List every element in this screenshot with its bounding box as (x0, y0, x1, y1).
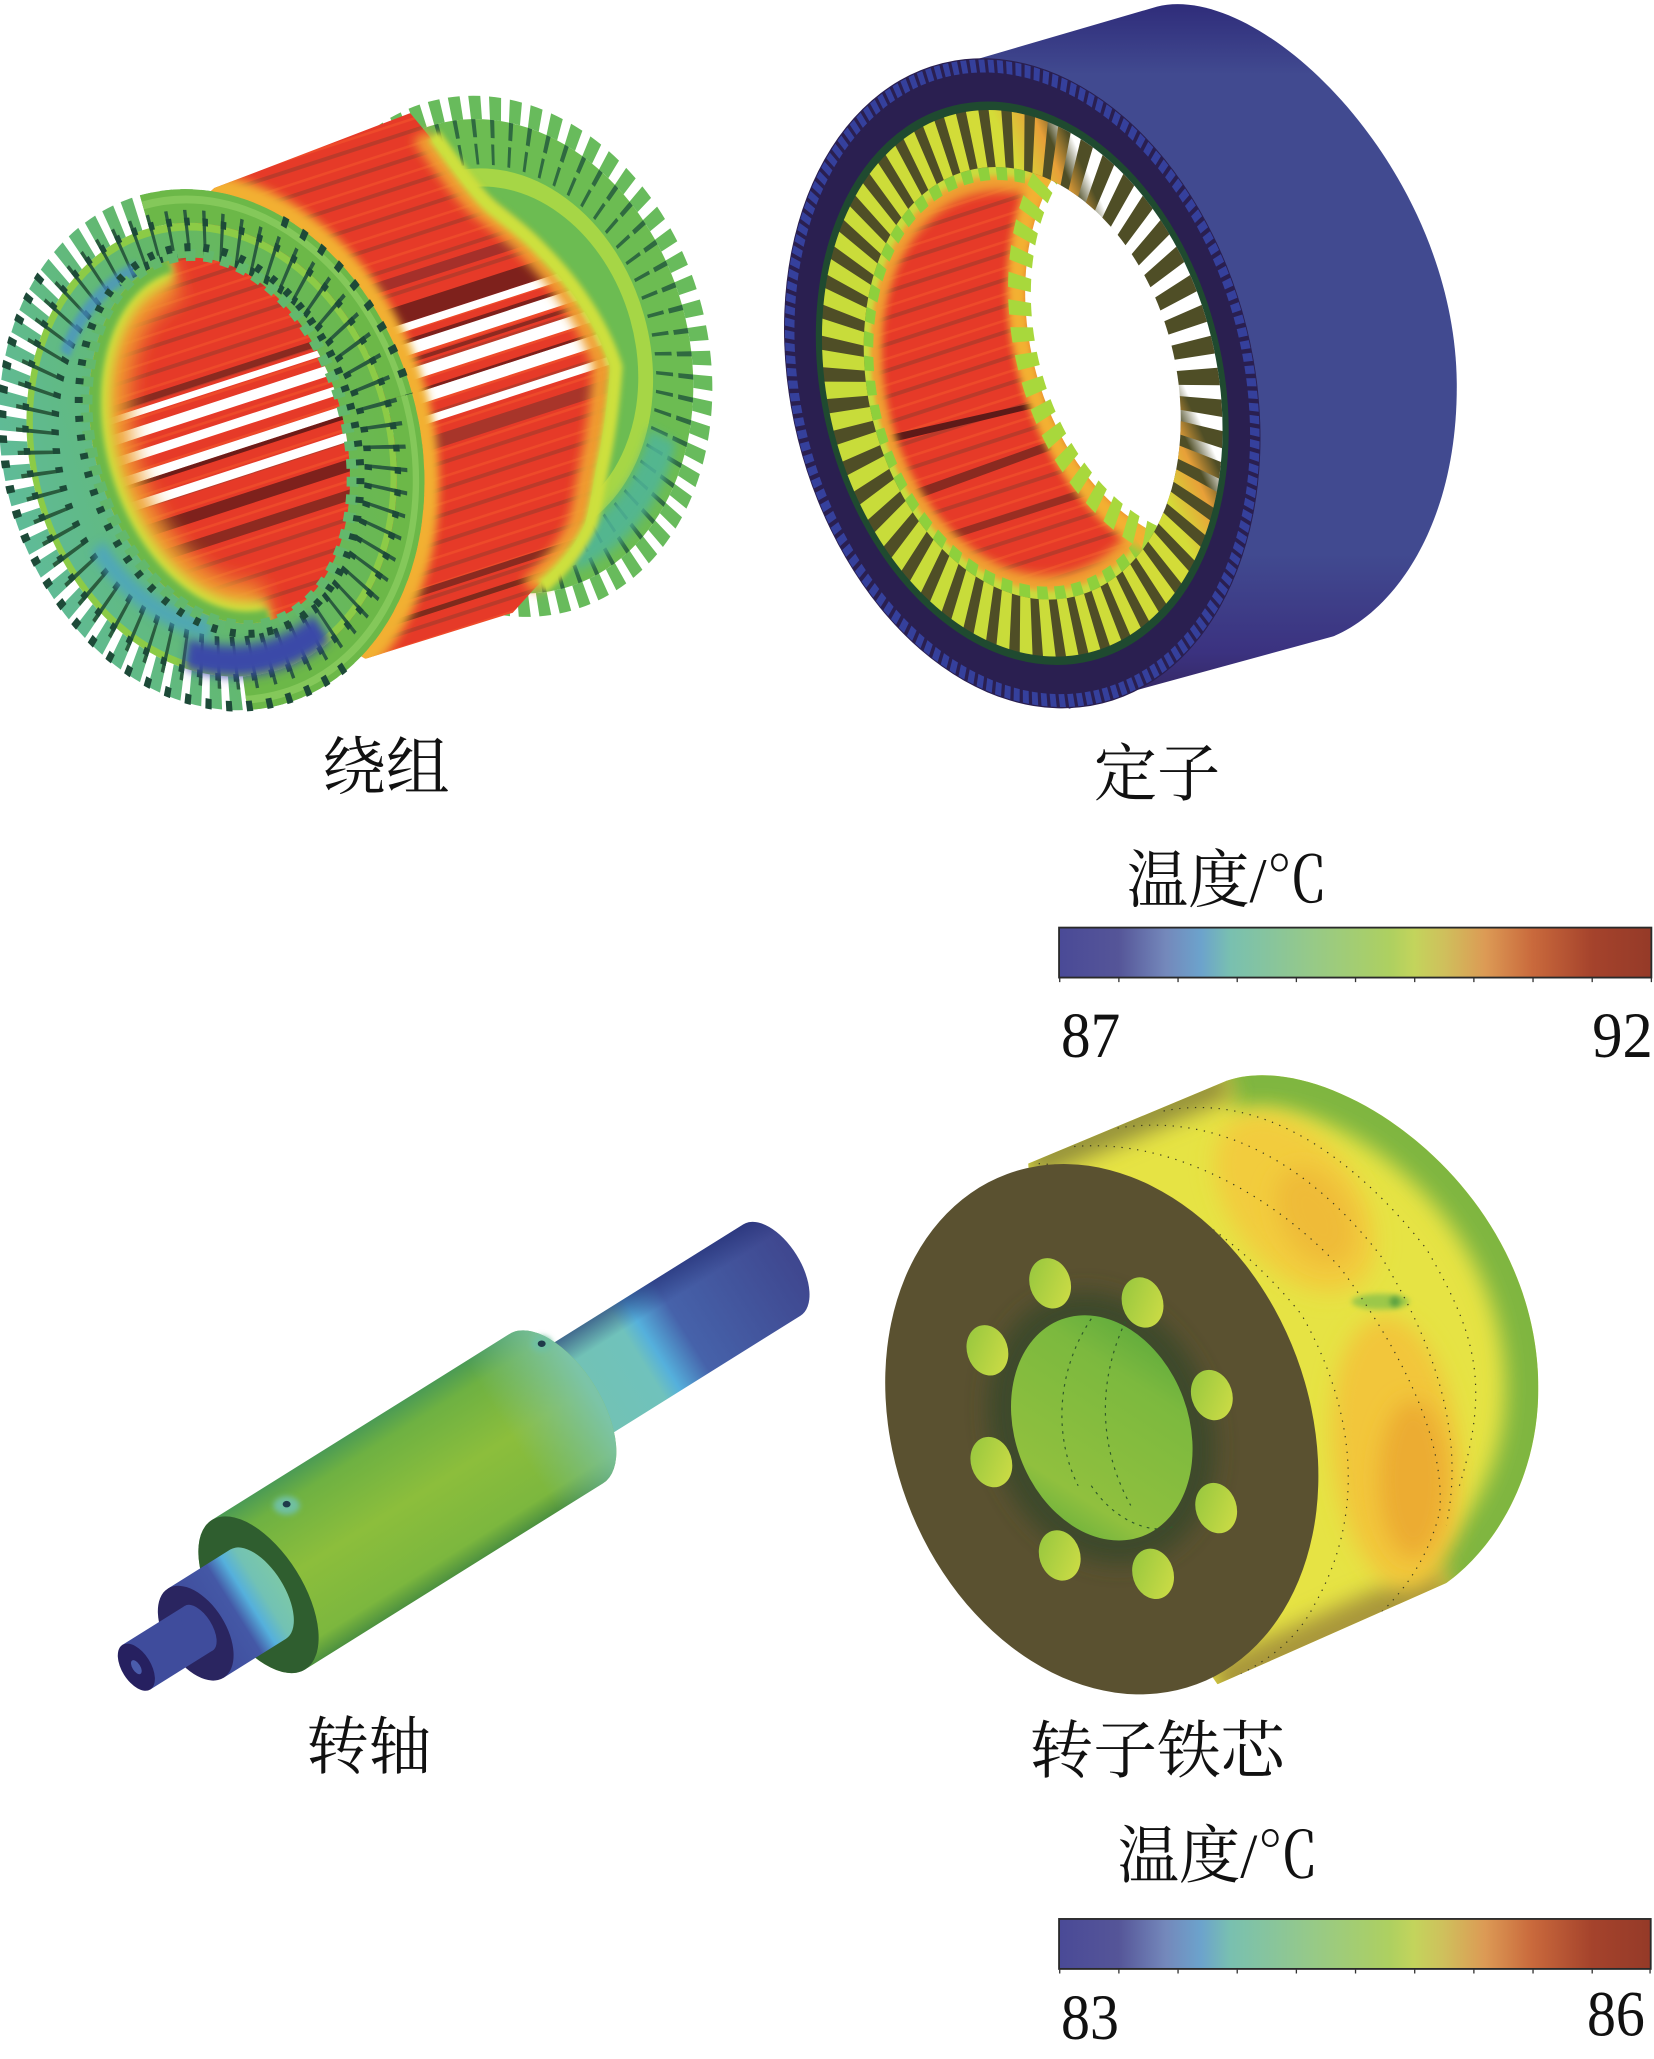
legend: lower temperature colour bar (1059, 1822, 1651, 2053)
colour ramp (1059, 928, 1651, 978)
winding: bore slots (90, 342, 350, 560)
tick marks (1060, 978, 1651, 982)
rotor: dotted lamination lines (1039, 1108, 1476, 1676)
shaft: small end journal (110, 1599, 224, 1697)
winding: label: 绕组 (322, 733, 450, 803)
stator: bore left fade (864, 167, 1146, 600)
legend title: 温度/℃ (1127, 846, 1328, 916)
rotor: shadow around centre bore (950, 1259, 1254, 1597)
stator: red inner bore and white opening (864, 167, 1181, 600)
rotor: side surface heat field (1028, 1075, 1538, 1684)
winding: jagged bore edge (36, 214, 403, 667)
min value: 87 (1061, 1000, 1120, 1071)
winding: front fade band (211, 175, 446, 659)
winding: rear fade edge of bars (421, 135, 615, 586)
max value: 86 (1587, 1978, 1645, 2049)
stator: front face rings (718, 7, 1327, 759)
winding: white slots and dark bars (332, 239, 609, 624)
shaft: label: 转轴 (306, 1712, 431, 1782)
legend title: 温度/℃ (1118, 1822, 1319, 1892)
rotor: centre shaft bore (980, 1289, 1223, 1567)
winding: front end turns and conductor tips (0, 144, 479, 756)
rotor: olive front face (812, 1102, 1391, 1757)
stator: rear opening with tooth sawtooth (1002, 172, 1181, 555)
rotor: label: 转子铁芯 (1029, 1716, 1287, 1786)
min value: 83 (1061, 1982, 1119, 2053)
shaft: body in axis-aligned coordinates (79, 1183, 845, 1752)
legend: upper temperature colour bar (1059, 846, 1653, 1071)
shaft: upper oil hole (531, 1336, 552, 1352)
shaft: far cylinder (548, 1209, 825, 1438)
figure: shaft temperature model (79, 1183, 845, 1782)
rotor: eight ventilation holes (960, 1253, 1243, 1605)
stator: teeth ring (793, 100, 1251, 667)
shaft: near end face (174, 1496, 343, 1693)
figure: rotor core temperature model (885, 1075, 1538, 1778)
shaft: stepped neck (142, 1536, 308, 1694)
tick marks (1060, 1970, 1650, 1974)
winding: bore left fade (89, 258, 282, 624)
shaft: lower oil hole (273, 1496, 300, 1515)
shaft: large green section (174, 1310, 641, 1693)
winding: inner bars seen through the bore (89, 258, 350, 624)
figure: winding temperature model (0, 60, 759, 803)
stator: blue outer cylinder (920, 4, 1457, 709)
colour ramp (1059, 1919, 1651, 1969)
winding: rear end turns (240, 60, 759, 653)
stator: label: 定子 (1094, 739, 1220, 809)
winding: outer red conductor bars (176, 113, 610, 659)
figure: stator temperature model (718, 4, 1457, 809)
